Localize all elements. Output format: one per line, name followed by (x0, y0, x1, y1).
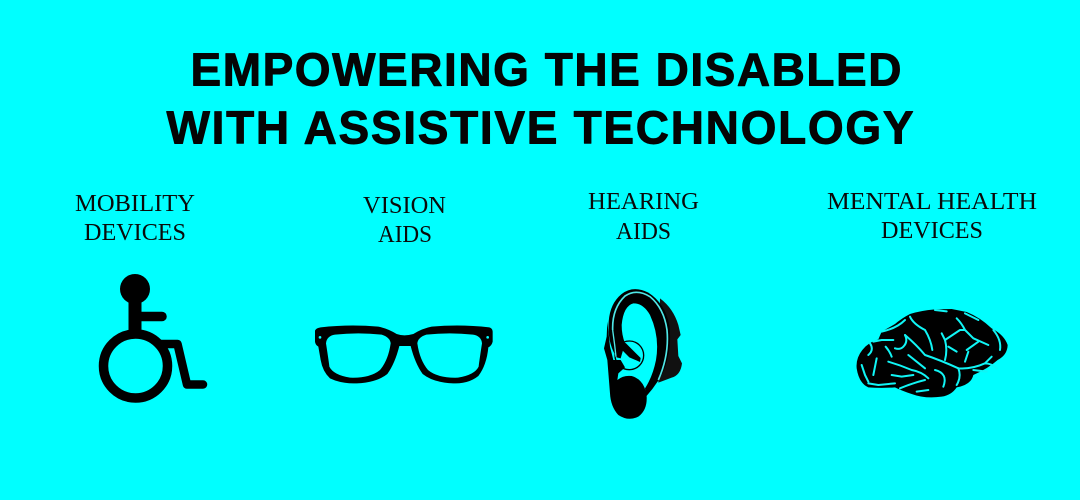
title: WITH ASSISTIVE TECHNOLOGY (166, 102, 914, 154)
title (166, 44, 914, 154)
label: hearing aids: HEARING (588, 189, 699, 215)
label: mental health devices: MENTAL HEALTH (827, 189, 1037, 215)
label: vision aids: AIDS (378, 222, 432, 248)
label: hearing aids: AIDS (616, 219, 671, 245)
title: EMPOWERING THE DISABLED (190, 44, 902, 96)
label: mobility devices: DEVICES (84, 220, 186, 246)
label: vision aids: VISION (363, 193, 446, 219)
label: mental health devices: DEVICES (881, 218, 983, 244)
icon: hearing aid (604, 289, 682, 419)
label: hearing aids (588, 189, 699, 245)
label: mobility devices: MOBILITY (75, 191, 195, 217)
icon: wheelchair (104, 274, 203, 398)
label: mobility devices (75, 191, 195, 246)
icon: glasses (315, 325, 493, 383)
icon: brain (857, 309, 1008, 397)
label: mental health devices (827, 189, 1037, 244)
label: vision aids (363, 193, 446, 248)
